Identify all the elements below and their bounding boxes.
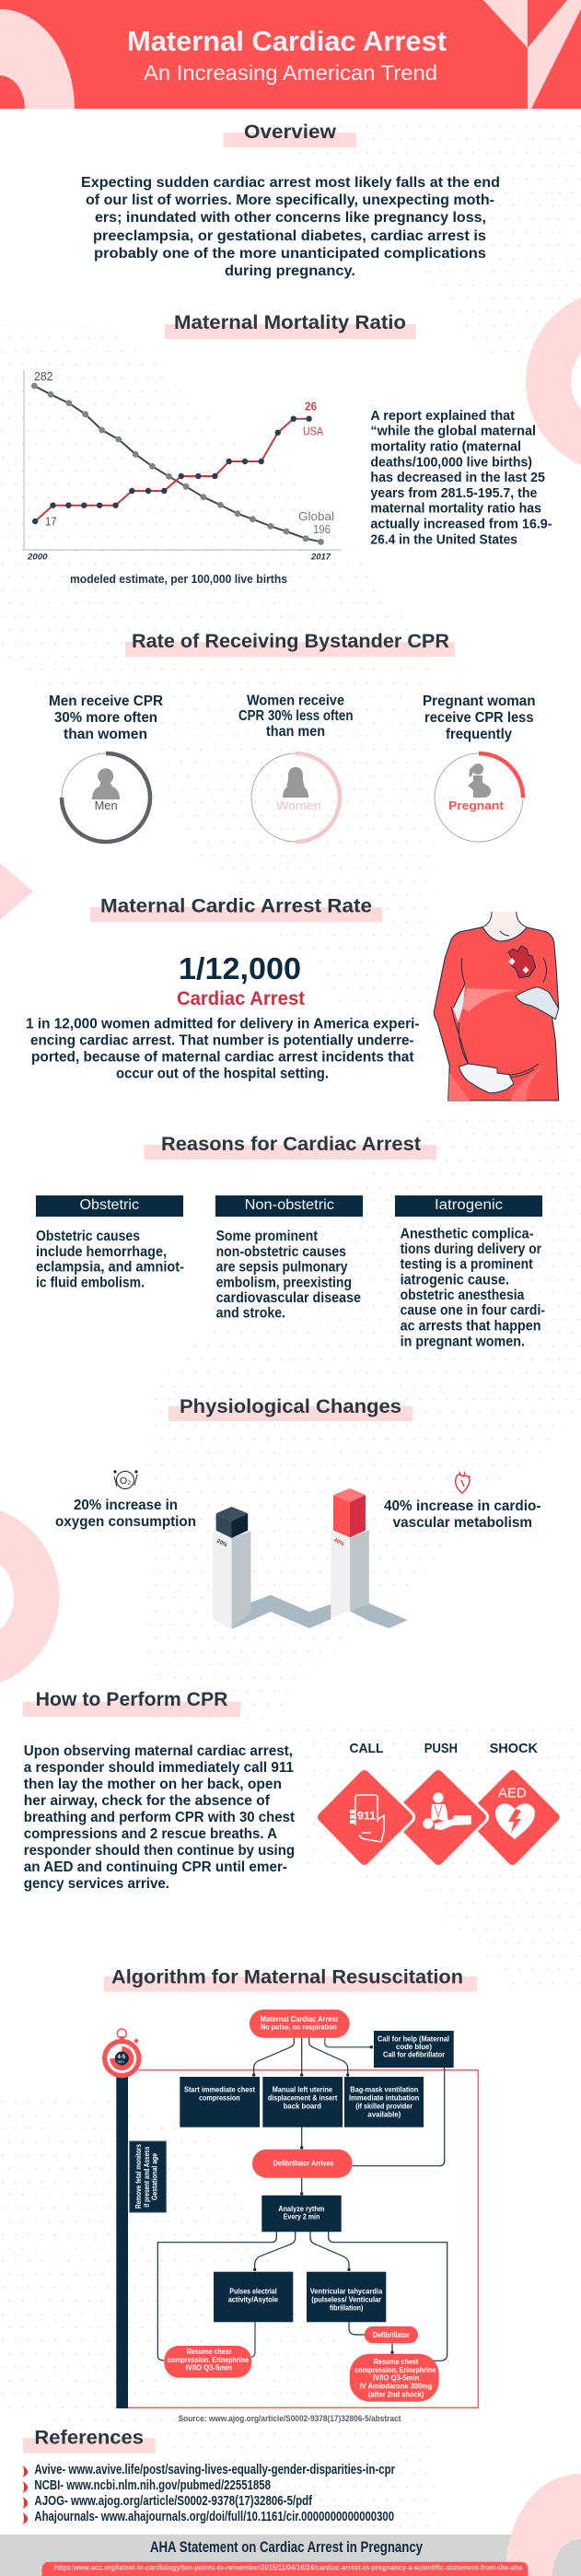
text: mortality report: A report explained that [370, 409, 515, 424]
text: mortality report: deaths/100,000 live births) [370, 455, 532, 470]
box: analyze rhythm: Every 2 min [284, 2212, 320, 2221]
node: resume compression left: Resume chest [187, 2347, 231, 2356]
box: fetal monitors: Remove fetal monitors [134, 2144, 143, 2209]
box: call for help: Call for defibrillator [383, 2050, 446, 2059]
line: USA series [32, 416, 312, 524]
text: overview paragraph: preeclampsia, or gestational diabetes, cardiac arrest is [93, 228, 486, 244]
box: chest compression [180, 2077, 260, 2127]
column: iatrogenic [395, 1195, 545, 1349]
box: uterine displacement [262, 2077, 343, 2127]
text: mortality report: maternal mortality ratio has [370, 502, 541, 517]
heading: maternal mortality ratio [165, 312, 416, 339]
box: analyze rhythm: Analyze rythm [278, 2204, 325, 2213]
box: uterine displacement: displacement & insert [268, 2093, 337, 2103]
statistic: 1/12,000: 1/12,000 [179, 951, 301, 985]
chart: isometric bars [213, 1488, 408, 1629]
heading: references: References [34, 2427, 144, 2448]
heading: overview [224, 122, 356, 147]
node: resume compression right [350, 2354, 439, 2402]
icon: stopwatch [102, 2029, 142, 2078]
text: mortality report: 26.4 in the United States [370, 532, 517, 547]
column: women [238, 693, 354, 842]
heading: how to perform CPR [23, 1689, 240, 1717]
reference list [23, 2463, 395, 2524]
box: call for help: Call for help (Maternal [378, 2034, 449, 2043]
box: ventricular tachycardia: fibrillation) [330, 2302, 363, 2312]
box: bag-mask ventilation: (if skilled provider [355, 2101, 413, 2110]
labels: call push shock: SHOCK [490, 1741, 538, 1756]
node: resume compression left: compression, Erinephrine [168, 2355, 249, 2364]
heading: references [23, 2427, 156, 2454]
heading: maternal mortality ratio: Maternal Mortality Ratio [174, 312, 406, 333]
column: obstetric: Obstetric causes [36, 1229, 140, 1244]
node: maternal cardiac arrest [250, 2010, 350, 2038]
node: maternal cardiac arrest: No pulse, no respiration [261, 2022, 337, 2032]
box: bag-mask ventilation: available) [367, 2109, 401, 2118]
text: CPR instructions: gency services arrive. [24, 1876, 169, 1892]
text: arrest rate paragraph: 1 in 12,000 women admitted for delivery in America experi- [26, 1017, 420, 1032]
text: arrest rate paragraph [26, 1017, 420, 1082]
illustration: pregnant woman with heart [434, 912, 559, 1101]
text: CPR instructions: Upon observing maternal cardiac arrest, [24, 1743, 293, 1759]
column: iatrogenic: Anesthetic complica- [401, 1227, 534, 1241]
icon: shock: AED [498, 1786, 527, 1801]
text: mortality report: mortality ratio (maternal [370, 440, 521, 455]
box: pulseless electrical activity: activity/Asytole [228, 2294, 278, 2303]
icon: pregnant woman [468, 763, 491, 798]
heading: bystander CPR: Rate of Receiving Bystander CPR [132, 631, 449, 652]
icon: stopwatch: min [118, 2059, 124, 2064]
column: pregnant [423, 694, 536, 842]
panel: header banner [0, 0, 581, 109]
reference list: AJOG- www.ajog.org/article/S0002-9378(17)32806-5/pdf [34, 2494, 312, 2509]
heading: physiological changes: Physiological Changes [180, 1396, 401, 1417]
node: defibrillator [365, 2326, 418, 2343]
icon: man [92, 768, 120, 799]
box: pulseless electrical activity: Pulses electrial [229, 2287, 277, 2296]
icon: oxygen: O₂ [120, 1475, 131, 1486]
text: overview paragraph: during pregnancy. [225, 263, 355, 279]
column: obstetric: ic fluid embolism. [36, 1275, 145, 1290]
text: mortality report: “while the global maternal [370, 425, 536, 439]
text: overview paragraph: of our list of worries. More specifically, unexpecting moth- [86, 192, 494, 208]
line chart: global vs USA: 17 [45, 516, 57, 529]
column: iatrogenic: Iatrogenic [435, 1197, 503, 1213]
flowchart frame [116, 2070, 478, 2408]
box: chest compression: compression [199, 2093, 240, 2103]
bar: 40%: 40% [332, 1537, 345, 1548]
column: pregnant: Pregnant woman [423, 694, 536, 709]
panel: physiological changes [55, 1396, 541, 1629]
footer title: AHA Statement on Cardiac Arrest in Pregnancy [150, 2538, 423, 2556]
box: ventricular tachycardia: (pulseless/ Venticular [311, 2294, 382, 2303]
icon: shock [471, 1775, 555, 1860]
column: pregnant: receive CPR less [424, 710, 534, 726]
labels: call push shock: PUSH [424, 1741, 458, 1756]
column: pregnant: frequently [446, 727, 512, 742]
heading: reasons: Reasons for Cardiac Arrest [161, 1134, 421, 1155]
neck [482, 912, 527, 941]
node: defibrillator: Defibrillator [373, 2330, 410, 2339]
column: iatrogenic: tions during delivery or [401, 1241, 541, 1257]
column: women: CPR 30% less often [238, 708, 354, 724]
heading: algorithm: Algorithm for Maternal Resuscitation [111, 1966, 463, 1987]
box: call for help: code blue) [396, 2042, 432, 2051]
box: bag-mask ventilation: Immediate intubation [349, 2093, 419, 2103]
column: obstetric: eclampsia, and amniot- [36, 1260, 184, 1276]
text: CPR instructions: breathing and perform CPR with 30 chest [24, 1810, 295, 1825]
node: defibrillator arrives [252, 2150, 353, 2178]
text: arrest rate paragraph: occur out of the hospital setting. [116, 1067, 329, 1082]
column: non-obstetric: and stroke. [216, 1306, 285, 1322]
node: resume compression left: IV/IO Q3-5min [186, 2363, 232, 2372]
column: iatrogenic: ac arrests that happen [401, 1319, 541, 1335]
text: CPR instructions: compressions and 2 rescue breaths. A [24, 1826, 277, 1842]
box: call for help [374, 2031, 454, 2068]
text: mortality report: years from 281.5-195.7, the [370, 486, 537, 501]
box: uterine displacement: Manual left uterine [273, 2085, 332, 2094]
text: overview paragraph: ers; inundated with other concerns like pregnancy loss, [95, 210, 486, 226]
column: women: than men [266, 724, 325, 740]
text: oxygen consumption [55, 1498, 196, 1530]
hand: upper [516, 987, 559, 1020]
node: resume compression right: IV Amiodarone 300mg [360, 2381, 432, 2390]
column: non-obstetric: Non-obstetric [245, 1197, 334, 1213]
text: oxygen consumption: oxygen consumption [55, 1514, 196, 1530]
column: men: Men receive CPR [49, 694, 163, 709]
label: cardiac arrest: Cardiac Arrest [177, 988, 305, 1009]
box: bag-mask ventilation: Bag-mask ventilation [350, 2085, 418, 2094]
column: iatrogenic: testing is a prominent [401, 1257, 533, 1273]
panel: how to perform CPR [23, 1689, 555, 1892]
reference list: Avive- www.avive.life/post/saving-lives-equally-gender-disparities-in-cpr [34, 2463, 395, 2477]
column: obstetric: include hemorrhage, [36, 1244, 167, 1260]
column: obstetric [36, 1195, 184, 1290]
column: women: Women receive [247, 693, 344, 708]
panel: overview [81, 122, 500, 279]
icon: heart outline [456, 1472, 471, 1493]
reference list: Ahajournals- www.ahajournals.org/doi/full/10.1161/cir.0000000000000300 [34, 2510, 394, 2524]
icon: CPR diamonds [322, 1775, 555, 1860]
node: resume compression right: Resume chest [374, 2357, 418, 2366]
box: pulseless electrical activity [214, 2272, 293, 2322]
bar: 40% [331, 1488, 369, 1618]
connector end dots [252, 2046, 394, 2354]
text: CPR instructions: a responder should immediately call 911 [24, 1760, 294, 1776]
box: ventricular tachycardia: Ventricular tahycardia [310, 2287, 382, 2296]
labels: call push shock: CALL [350, 1741, 383, 1756]
column: men [49, 694, 163, 842]
heading: cardiac arrest rate: Maternal Cardic Arrest Rate [100, 896, 372, 917]
text: arrest rate paragraph: ported, because of maternal cardiac arrest incidents that [31, 1050, 414, 1066]
line chart: global vs USA: 2017 [310, 553, 331, 563]
icon: push [395, 1775, 482, 1860]
node: maternal cardiac arrest: Maternal Cardiac Arrest [261, 2014, 338, 2023]
node: defibrillator arrives: Defibrillator Arrives [273, 2159, 333, 2168]
column: non-obstetric: Some prominent [216, 1229, 318, 1244]
source note: Source: www.ajog.org/article/S0002-9378(17)32806-5/abstract [179, 2414, 401, 2424]
box: ventricular tachycardia [307, 2272, 386, 2322]
column: iatrogenic: obstetric anesthesia [401, 1288, 525, 1303]
column: men: than women [64, 727, 147, 742]
heading: overview: Overview [244, 122, 337, 143]
icon: woman [283, 767, 308, 798]
column: iatrogenic: iatrogenic cause. [401, 1272, 509, 1288]
text: CPR instructions [24, 1743, 295, 1892]
column: men: Men [95, 798, 118, 812]
line: global series [31, 383, 324, 545]
text: CPR instructions: an AED and continuing CPR until emer- [24, 1859, 287, 1875]
line chart: global vs USA: 282 [34, 370, 53, 383]
column: non-obstetric [215, 1195, 363, 1322]
dress [434, 927, 559, 1101]
text: arrest rate paragraph: encing cardiac arrest. That number is potentially underre- [30, 1033, 414, 1049]
text: cardiovascular metabolism [384, 1498, 541, 1531]
line chart: global vs USA: 26 [305, 401, 317, 414]
box: chest compression: Start immediate chest [184, 2085, 255, 2094]
column: iatrogenic: cause one in four cardi- [401, 1303, 545, 1319]
text: mortality report: has decreased in the last 25 [370, 471, 545, 485]
text: CPR instructions: her airway, check for the absence of [24, 1793, 271, 1809]
icon: call: 911 [357, 1810, 376, 1823]
panel: reasons for cardiac arrest [36, 1134, 545, 1349]
node: resume compression right: compression, Erinephrine [354, 2365, 436, 2374]
column: pregnant: Pregnant [448, 798, 505, 812]
column: women: Women [276, 798, 320, 812]
text: mortality report [370, 409, 552, 547]
connectors [157, 2038, 447, 2360]
chart caption: modeled estimate, per 100,000 live births [70, 573, 287, 586]
icon: stopwatch: 4-5 [118, 2055, 126, 2060]
panel: maternal cardiac arrest rate [26, 896, 559, 1101]
column: non-obstetric: cardiovascular disease [216, 1290, 361, 1306]
text: cardiovascular metabolism: 40% increase in cardio- [384, 1498, 541, 1514]
column: non-obstetric: embolism, preexisting [216, 1275, 352, 1290]
column: men: 30% more often [54, 710, 157, 726]
box: fetal monitors [130, 2141, 166, 2212]
icon: call [322, 1775, 408, 1860]
subtitle: An Increasing American Trend [144, 61, 437, 85]
line chart: global vs USA: 2000 [27, 553, 48, 563]
text: overview paragraph: probably one of the more unanticipated complications [94, 246, 486, 262]
line chart: global vs USA: Global [298, 510, 334, 523]
line chart: global vs USA: USA [303, 425, 324, 438]
column: non-obstetric: non-obstetric causes [216, 1244, 346, 1260]
node: resume compression right: IV/IO Q3-5min [373, 2373, 419, 2383]
column: iatrogenic: in pregnant women. [401, 1334, 525, 1349]
box: analyze rhythm [261, 2196, 342, 2232]
footer link bar [42, 2562, 529, 2576]
panel: algorithm for maternal resuscitation [102, 1966, 478, 2424]
node: resume compression right: (after 2nd shock) [368, 2389, 424, 2398]
icon: oxygen [113, 1470, 138, 1488]
title: Maternal Cardiac Arrest [127, 25, 447, 57]
text: CPR instructions: responder should then continue by using [24, 1843, 295, 1859]
bar: 20% [213, 1507, 250, 1629]
column: non-obstetric: are sepsis pulmonary [216, 1260, 348, 1276]
text: mortality report: actually increased from 16.9- [370, 518, 552, 532]
icon: heart [508, 946, 536, 978]
labels: call push shock [350, 1741, 538, 1756]
box: uterine displacement: back board [284, 2101, 321, 2110]
panel: footer [0, 2474, 581, 2576]
node: resume compression left [164, 2346, 251, 2378]
panel: maternal mortality ratio [24, 312, 552, 586]
panel: rate of receiving bystander CPR [49, 631, 536, 842]
text: overview paragraph [81, 175, 500, 279]
text: overview paragraph: Expecting sudden cardiac arrest most likely falls at the end [81, 175, 500, 191]
bar: 20%: 20% [215, 1538, 228, 1549]
box: bag-mask ventilation [344, 2077, 424, 2127]
panel: references [23, 2427, 395, 2524]
heading: how to perform CPR: How to Perform CPR [36, 1689, 227, 1710]
footer link bar: https:www.acc.org/latest-in-cardiology/ten-points-to-remember/2015/11/04/16/24/cardiac-arrest-in-pregnancy-a-scientific-statement-from-the-aha [54, 2564, 523, 2572]
text: cardiovascular metabolism: vascular metabolism [393, 1515, 532, 1531]
box: fetal monitors: if present and Assess [142, 2147, 151, 2208]
hand: lower [459, 1064, 514, 1093]
line chart: global vs USA: 196 [313, 523, 331, 536]
column: obstetric: Obstetric [79, 1197, 139, 1213]
box: fetal monitors: Gestational age [149, 2153, 158, 2200]
text: CPR instructions: then lay the mother on her back, open [24, 1777, 282, 1792]
text: oxygen consumption: 20% increase in [74, 1498, 178, 1513]
line chart: global vs USA [24, 370, 340, 563]
reference list: NCBI- www.ncbi.nlm.nih.gov/pubmed/22551858 [34, 2478, 271, 2493]
